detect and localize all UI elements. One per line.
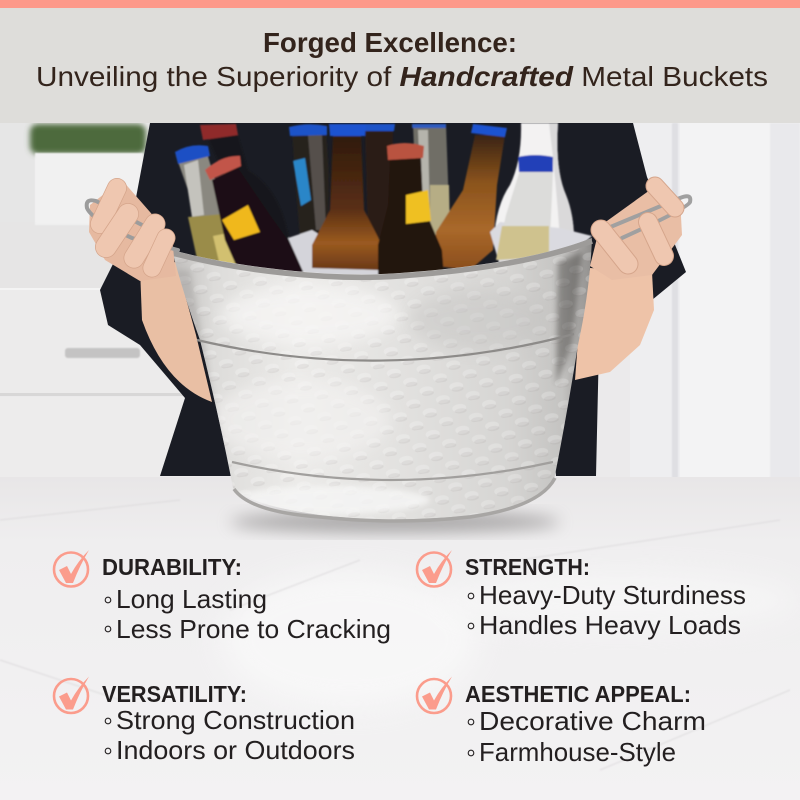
benefit: versatility	[54, 676, 355, 765]
front clear bottle	[496, 170, 553, 260]
heading: DURABILITY:	[102, 554, 242, 580]
left hand	[87, 180, 178, 281]
ice right	[490, 222, 592, 266]
ice left	[288, 230, 380, 276]
benefit: durability	[54, 550, 391, 644]
bottles	[175, 123, 592, 276]
benefit: strength	[417, 550, 746, 640]
bullet list: Indoors or Outdoors	[116, 735, 355, 765]
bullet list	[105, 705, 355, 765]
left handle	[87, 200, 178, 250]
bullet list	[468, 580, 746, 640]
back clear bottle	[412, 127, 449, 208]
white bottle	[494, 123, 574, 240]
marble counter	[0, 477, 800, 800]
icon: check circle	[54, 676, 89, 713]
door panels	[630, 123, 800, 478]
heading: STRENGTH:	[465, 554, 590, 580]
title line 1: Forged Excellence:	[263, 27, 517, 58]
icon: check circle	[417, 676, 452, 713]
amber tilted bottle right	[436, 135, 505, 270]
dark red cap bottle	[378, 158, 444, 276]
bullet list: Farmhouse-Style	[479, 737, 676, 767]
right arm	[575, 268, 654, 380]
bullet list: Long Lasting	[116, 584, 267, 614]
right hand	[590, 186, 690, 280]
red foil bottle	[208, 134, 290, 242]
bucket	[170, 235, 600, 530]
title line 2: Unveiling the Superiority of Handcrafted Metal Buckets	[36, 61, 768, 92]
bullet list: Strong Construction	[116, 705, 355, 735]
bullet list	[105, 584, 391, 644]
heading: AESTHETIC APPEAL:	[465, 681, 691, 707]
amber bottle center	[312, 135, 382, 270]
right handle	[608, 196, 690, 238]
bullet list: Handles Heavy Loads	[479, 610, 741, 640]
icon: check circle	[54, 550, 89, 586]
bullet list	[468, 706, 706, 767]
title banner	[0, 8, 800, 123]
clear tilted bottle	[178, 156, 221, 217]
person shirt	[100, 123, 686, 476]
back dark bottle	[365, 125, 393, 240]
plant and pot	[30, 124, 146, 154]
top accent bar	[0, 0, 800, 8]
kitchen background	[0, 123, 800, 483]
left arm	[140, 262, 212, 402]
red cap dark tilted bottle	[212, 169, 304, 272]
bullet list: Heavy-Duty Sturdiness	[479, 580, 746, 610]
icon: check circle	[417, 550, 452, 586]
bucket rim	[172, 241, 592, 277]
heading: VERSATILITY:	[102, 681, 247, 707]
bullet list: Less Prone to Cracking	[116, 614, 391, 644]
benefit: aesthetic appeal	[417, 676, 706, 767]
bullet list: Decorative Charm	[479, 706, 706, 736]
dark bottle, blue label	[292, 130, 329, 238]
bucket bands	[197, 334, 574, 361]
